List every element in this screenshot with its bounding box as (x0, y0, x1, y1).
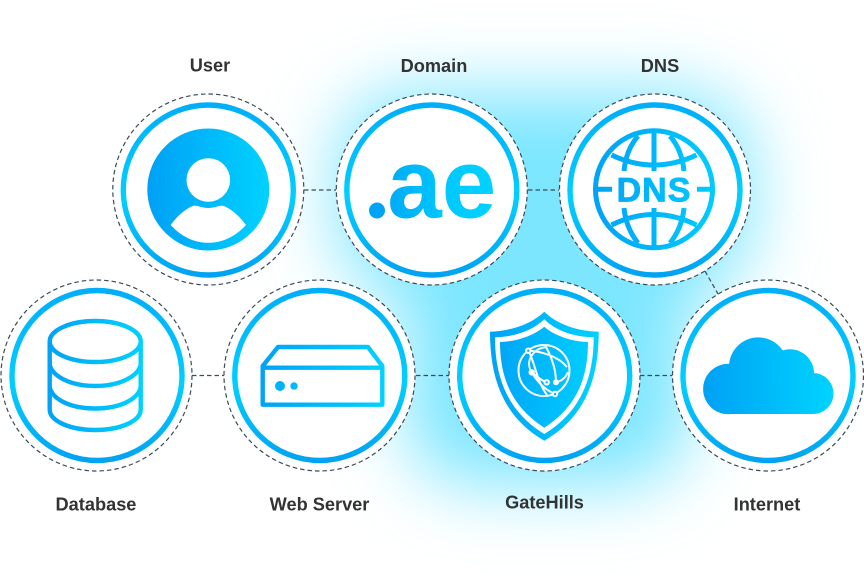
icon: server box (263, 347, 382, 405)
node: Domain (336, 94, 527, 285)
connector lines (192, 190, 718, 376)
background glow (338, 92, 750, 485)
icon: shield with globe (490, 312, 599, 441)
icon: DNS globe: DNS (617, 172, 691, 210)
label: User: User (190, 56, 230, 76)
label: DNS: DNS (641, 56, 679, 76)
icon: database cylinder (50, 321, 141, 430)
icon: cloud (703, 337, 834, 414)
node: Database (1, 280, 192, 471)
node: User (113, 94, 304, 285)
node: DNS (560, 94, 750, 285)
label: Internet: Internet (734, 494, 800, 514)
node: Web Server (224, 280, 415, 471)
icon: DNS globe (596, 131, 712, 248)
label: Database: Database (56, 494, 136, 514)
label: Web Server: Web Server (270, 494, 369, 514)
node: Internet (672, 280, 864, 471)
label: GateHills: GateHills (505, 492, 584, 512)
icon: user avatar (147, 128, 269, 250)
label: Domain: Domain (401, 56, 467, 76)
node: GateHills (449, 280, 640, 471)
